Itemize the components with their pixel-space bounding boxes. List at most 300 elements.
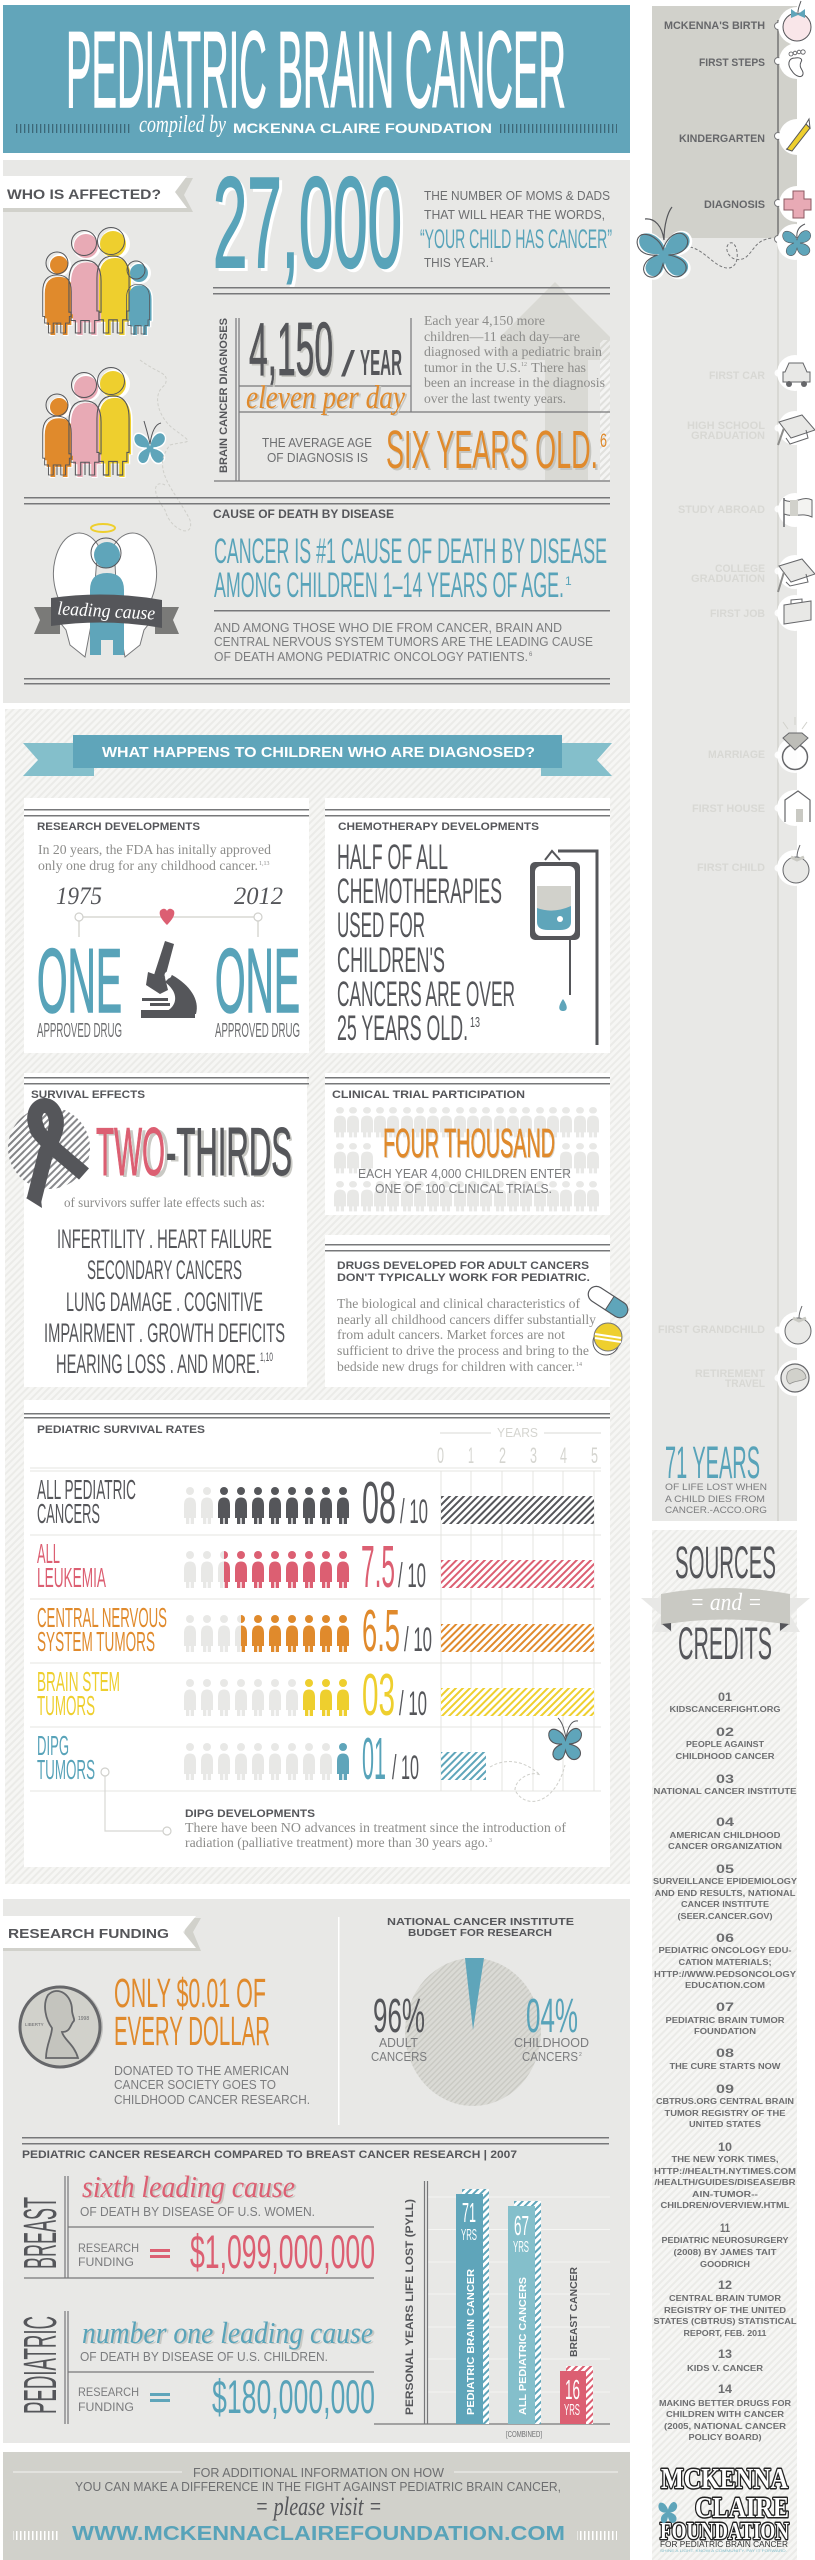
comparison: breast cancer: BREAST (14, 2197, 66, 2269)
logo: mckenna claire foundation: CLAIRE (695, 2492, 789, 2524)
list: sources: GOODRICH (700, 2260, 750, 2269)
icon: capsule (585, 1283, 631, 1321)
timeline labels lost: COLLEGE (715, 563, 765, 575)
list: sources: 02 (716, 1725, 734, 1739)
row: brain stem tumors: / 10 (399, 1685, 427, 1723)
pie chart: nci budget: BUDGET FOR RESEARCH (408, 1927, 552, 1939)
list: sources: 13 (718, 2347, 732, 2361)
panel: who is affected (3, 151, 630, 703)
bar chart: personal years of life lost: PERSONAL YEARS LIFE LOST (PYLL) (404, 2199, 416, 2415)
list: sources: KIDS V. CANCER (687, 2364, 763, 2373)
timeline labels lost: FIRST HOUSE (692, 803, 765, 815)
row: central nervous system tumors: 6.5 (362, 1598, 400, 1664)
row: all leukemia: LEUKEMIA (37, 1562, 106, 1593)
list: sources: CATION MATERIALS; (678, 1958, 772, 1967)
card: survival effects (8, 1073, 309, 1387)
statistic: one cent of every dollar: EVERY DOLLAR (114, 2008, 270, 2054)
list: sources: PEDIATRIC ONCOLOGY EDU- (658, 1946, 792, 1955)
icon: flag (778, 493, 812, 527)
icon: penny: LIBERTY (25, 2022, 44, 2027)
icon: angel with leading cause banner (34, 524, 179, 657)
list: sources: 03 (716, 1772, 734, 1786)
people grid (334, 1107, 599, 1211)
list: sources: FOUNDATION (694, 2027, 756, 2036)
text: parents hearing the words: THAT WILL HEAR THE WORDS, (424, 207, 605, 222)
timeline labels lost: RETIREMENT (695, 1368, 765, 1380)
panel: what happens to children: TWO-THIRDS (98, 1116, 294, 1192)
list: sources: PEDIATRIC NEUROSURGERY (662, 2236, 789, 2245)
card: survival effects: -THIRDS (166, 1114, 292, 1190)
text: brain cancer diagnoses: 4,150 (249, 307, 333, 391)
card: research developments: APPROVED DRUG (37, 1020, 122, 1042)
list: sources: CHILDREN WITH CANCER (666, 2410, 784, 2419)
footer: call to action (3, 2452, 630, 2560)
statistic: one cent of every dollar: DONATED TO THE AMERICAN (114, 2064, 289, 2078)
timeline labels lost: GRADUATION (691, 573, 765, 585)
timeline labels lost: FIRST CAR (709, 370, 765, 382)
text: half of all chemotherapies: HALF OF ALL (337, 838, 448, 877)
row: all pediatric cancers: ALL PEDIATRIC (37, 1474, 136, 1505)
text: brain cancer diagnoses: OF DIAGNOSIS IS (267, 450, 368, 465)
row: brain stem tumors: BRAIN STEM (37, 1666, 120, 1697)
list: sources: 06 (716, 1931, 734, 1945)
ribbon heading (23, 735, 612, 776)
timeline labels lived: FIRST STEPS (699, 57, 765, 69)
text: brain cancer diagnoses: over the last twenty years. (424, 392, 566, 407)
row: all pediatric cancers: 08 (362, 1470, 396, 1536)
card: drugs developed for adults: from adult cancers. Market forces are not (337, 1328, 565, 1343)
card: drugs developed for adults: DON'T TYPICALLY WORK FOR PEDIATRIC. (337, 1272, 590, 1284)
text: brain cancer diagnoses: been an increase in the diagnosis (424, 376, 605, 391)
text: half of all chemotherapies: 13 (470, 1014, 480, 1031)
logo: mckenna claire foundation (658, 2463, 790, 2553)
list: sources: 05 (716, 1862, 734, 1876)
list: sources: (2008) BY JAMES TAIT (674, 2248, 777, 2257)
timeline nodes (774, 22, 782, 1382)
list: sources: (SEER.CANCER.GOV) (678, 1912, 773, 1921)
statistic: four thousand: FOUR THOUSAND (383, 1120, 555, 1166)
card: pediatric survival rates (24, 1400, 610, 1867)
list: sources: UNITED STATES (689, 2120, 762, 2129)
list: sources: NATIONAL CANCER INSTITUTE (654, 1787, 797, 1796)
list: sources: THE NEW YORK TIMES, (672, 2155, 778, 2164)
timeline labels lived (664, 20, 765, 211)
pie chart: nci budget: 2 (579, 2052, 582, 2058)
card: chemotherapy developments (325, 798, 610, 1053)
list: sources: STATES (CBTRUS) STATISTICAL (654, 2317, 797, 2326)
years axis: 4 (560, 1443, 567, 1468)
list: sources: 01 (718, 1690, 732, 1704)
statistic: four thousand: FOUR THOUSAND (384, 1121, 556, 1167)
footer: call to action: FOR ADDITIONAL INFORMATION ON HOW (193, 2465, 445, 2480)
comparison: breast cancer: RESEARCH (78, 2241, 139, 2255)
list: sources: POLICY BOARD) (688, 2433, 762, 2442)
text: brain cancer diagnoses: 6 (600, 431, 607, 452)
text: cause of death by disease: 6 (529, 652, 533, 658)
list: sources (653, 1690, 798, 2442)
statistic: one approved drug 1975 (37, 931, 122, 1042)
pie chart: nci budget: 96% (373, 1990, 425, 2043)
panel: what happens to children (5, 709, 631, 1884)
list: sources: /HEALTH/GUIDES/DISEASE/BR (654, 2178, 796, 2187)
card: drugs developed for adults: DRUGS DEVELOPED FOR ADULT CANCERS (337, 1260, 589, 1272)
list: sources: REGISTRY OF THE UNITED (664, 2306, 786, 2315)
statistic: four thousand: EACH YEAR 4,000 CHILDREN ENTER (358, 1166, 571, 1181)
text: half of all chemotherapies (337, 838, 515, 1048)
card: chemotherapy developments: CANCERS ARE OVER (337, 975, 515, 1014)
row: central nervous system tumors: CENTRAL NERVOUS (37, 1602, 167, 1633)
row: dipg tumors: / 10 (392, 1749, 419, 1787)
icon: yellow pill (593, 1323, 622, 1355)
icon: first child (777, 845, 813, 886)
icon: small butterfly (777, 224, 813, 260)
icon: microscope (141, 941, 197, 1018)
row: brain stem tumors: 03 (362, 1662, 395, 1728)
text: brain cancer diagnoses: THE AVERAGE AGE (262, 435, 372, 450)
statistic: four thousand: ONE OF 100 CLINICAL TRIALS. (375, 1181, 552, 1196)
list: sources: (2005, NATIONAL CANCER (664, 2422, 786, 2431)
footer: call to action: = please visit = (255, 2492, 382, 2521)
card: drugs developed for adults: sufficient to drive the process and bring to the (337, 1344, 589, 1359)
list: late effects: LUNG DAMAGE . COGNITIVE (66, 1287, 263, 1317)
card: drugs developed for adults: The biological and clinical characteristics of (337, 1297, 580, 1312)
statistic: one cent of every dollar: CHILDHOOD CANCER RESEARCH. (114, 2093, 310, 2107)
list: sources: AIN-TUMOR-- (692, 2190, 758, 2199)
row: central nervous system tumors: / 10 (404, 1621, 432, 1659)
text: brain cancer diagnoses: BRAIN CANCER DIAGNOSES (218, 318, 230, 473)
text: cause of death by disease: 1 (565, 574, 572, 588)
row: dipg tumors: TUMORS (37, 1754, 95, 1785)
list: sources: CANCER INSTITUTE (681, 1900, 770, 1909)
timeline labels lost: TRAVEL (725, 1378, 765, 1390)
section banner: research funding: RESEARCH FUNDING (8, 1926, 169, 1941)
text: brain cancer diagnoses: 12 (521, 362, 527, 368)
heading: sources and credits (641, 1537, 810, 1669)
icon: baby with bow (778, 1, 815, 45)
text: cause of death by disease: CENTRAL NERVOUS SYSTEM TUMORS ARE THE LEADING CAUSE (214, 634, 593, 649)
panel: research funding: PEDIATRIC CANCER RESEARCH COMPARED TO BREAST CANCER RESEARCH | 2007 (22, 2149, 517, 2161)
statistic: four thousand (358, 1120, 571, 1196)
statistic: 71 years of life lost: OF LIFE LOST WHEN (665, 1482, 767, 1493)
subtitle: MCKENNA CLAIRE FOUNDATION (233, 120, 492, 136)
text: brain cancer diagnoses: Each year 4,150 more (424, 314, 545, 329)
icon: college cap (778, 555, 815, 592)
callout: dipg developments (101, 1768, 566, 1851)
card: research developments: APPROVED DRUG (215, 1020, 300, 1042)
list: sources: CENTRAL BRAIN TUMOR (669, 2294, 781, 2303)
text: cause of death by disease (213, 507, 610, 664)
callout: dipg developments: DIPG DEVELOPMENTS (185, 1808, 315, 1820)
text: brain cancer diagnoses: SIX YEARS OLD. (386, 420, 598, 480)
icon: family with butterfly (43, 360, 191, 531)
panel: research funding: PEDIATRIC (14, 2316, 66, 2414)
callout: dipg developments: There have been NO advances in treatment since the introduction of (185, 1821, 566, 1836)
text: parents hearing the words: THE NUMBER OF MOMS & DADS (424, 188, 610, 203)
row: all pediatric cancers: CANCERS (37, 1498, 100, 1529)
callout: dipg developments: 3 (489, 1838, 492, 1844)
bar chart: personal years of life lost: YRS (513, 2239, 529, 2256)
icon: grandchild (779, 1306, 815, 1348)
text: brain cancer diagnoses: eleven per day (248, 381, 407, 417)
list: sources: PEOPLE AGAINST (686, 1740, 764, 1749)
logo: mckenna claire foundation: SHINE A LIGHT. KNOW A COMMUNITY. PAY IT FORWARD. (660, 2548, 787, 2553)
text: brain cancer diagnoses: / (341, 343, 355, 384)
timeline labels lost: FIRST CHILD (697, 862, 765, 874)
list: sources: SURVEILLANCE EPIDEMIOLOGY (653, 1877, 798, 1886)
pie chart: nci budget (371, 1916, 589, 2106)
icon: penny: 1998 (78, 2016, 89, 2022)
bar chart: personal years of life lost: YRS (461, 2227, 477, 2244)
list: sources: REPORT, FEB. 2011 (684, 2329, 767, 2338)
list: late effects: HEARING LOSS . AND MORE. (56, 1349, 260, 1379)
list: late effects: INFERTILITY . HEART FAILURE (57, 1224, 272, 1254)
list: sources: 04 (716, 1815, 734, 1829)
row: all pediatric cancers: / 10 (400, 1493, 428, 1531)
timeline labels lost: FIRST GRANDCHILD (658, 1324, 765, 1336)
text: parents hearing the words (420, 188, 612, 270)
icon: penny (20, 1986, 103, 2068)
text: half of all chemotherapies: CHEMOTHERAPIES (337, 872, 502, 911)
icon: family of four (43, 228, 153, 336)
statistic: 71 years of life lost: CANCER.-ACCO.ORG (665, 1505, 767, 1516)
section banner: who is affected (3, 176, 187, 208)
list: sources: TUMOR REGISTRY OF THE (664, 2109, 786, 2118)
statistic: 27,000 (213, 151, 405, 298)
logo: mckenna claire foundation: MCKENNA (661, 2463, 788, 2495)
icon: car (777, 355, 813, 391)
row: central nervous system tumors (38, 1608, 594, 1652)
logo: mckenna claire foundation: FOR PEDIATRIC BRAIN CANCER (660, 2540, 788, 2549)
list: sources: PEDIATRIC BRAIN TUMOR (666, 2016, 785, 2025)
text: brain cancer diagnoses: 4,150 (251, 309, 335, 393)
panel: research funding (3, 1899, 630, 2443)
icon: large butterfly with flight path (637, 207, 772, 278)
bar chart: personal years of life lost: YRS (564, 2402, 580, 2419)
list: sources: HTTP://WWW.PEDSONCOLOGY (654, 1970, 797, 1979)
statistic: one cent of every dollar (114, 1970, 310, 2107)
list: sources: CHILDREN/OVERVIEW.HTML (660, 2201, 790, 2210)
comparison: breast cancer: FUNDING (78, 2255, 134, 2269)
comparison: pediatric cancer (14, 2311, 375, 2424)
panel: who is affected: 27,000 (213, 151, 402, 295)
panel: what happens to children: ONE (215, 931, 300, 1032)
years axis: 1 (468, 1443, 474, 1468)
icon: footprint (779, 43, 815, 79)
comparison: pediatric cancer: number one leading cause (84, 2316, 375, 2351)
bar chart: personal years of life lost: [COMBINED] (506, 2430, 542, 2439)
timeline labels lost (658, 370, 765, 1390)
icon: awareness ribbon (8, 1105, 90, 1208)
subtitle: compiled by (139, 112, 226, 138)
footer: call to action: WWW.MCKENNACLAIREFOUNDATION.COM (72, 2523, 565, 2545)
text: brain cancer diagnoses: diagnosed with a pediatric brain (424, 345, 602, 360)
text: brain cancer diagnoses: SIX YEARS OLD. (388, 422, 600, 482)
list: sources: 12 (718, 2278, 732, 2292)
pie chart: nci budget: CANCERS (522, 2050, 578, 2064)
ribbon heading: WHAT HAPPENS TO CHILDREN WHO ARE DIAGNOSED? (102, 744, 535, 761)
icon: iv bag and drip (530, 851, 597, 1045)
text: parents hearing the words: THIS YEAR. (424, 255, 489, 270)
panel: who is affected: 27,000 (216, 154, 405, 298)
card: research developments: 1,13 (259, 861, 270, 867)
list: sources: KIDSCANCERFIGHT.ORG (670, 1705, 780, 1714)
years axis: YEARS (497, 1425, 538, 1440)
card: drugs developed for adults: bedside new drugs for children with cancer. (337, 1360, 575, 1375)
card: pediatric survival rates: PEDIATRIC SURVIVAL RATES (37, 1424, 205, 1436)
list: sources: MAKING BETTER DRUGS FOR (659, 2399, 791, 2408)
text: brain cancer diagnoses (214, 307, 610, 482)
text: brain cancer diagnoses: children—11 each day—are (424, 330, 580, 345)
bar chart: personal years of life lost: PEDIATRIC BRAIN CANCER (466, 2268, 477, 2415)
bar chart: personal years of life lost: 16 (565, 2374, 580, 2405)
section banner: research funding (3, 1916, 201, 1951)
list: late effects (44, 1224, 285, 1379)
bar chart: personal years of life lost (374, 2181, 610, 2439)
statistic: one cent of every dollar: ONLY $0.01 OF (114, 1970, 266, 2016)
list: sources: AND END RESULTS, NATIONAL (654, 1889, 796, 1898)
timeline labels lost: HIGH SCHOOL (687, 420, 765, 432)
section banner: who is affected: WHO IS AFFECTED? (7, 186, 161, 202)
row: dipg tumors (37, 1726, 486, 1792)
card: research developments (24, 798, 309, 1053)
list: sources: AMERICAN CHILDHOOD (670, 1831, 781, 1840)
card: research developments: ONE (37, 931, 122, 1032)
timeline labels lived: DIAGNOSIS (704, 199, 765, 211)
pie chart: nci budget: NATIONAL CANCER INSTITUTE (387, 1916, 574, 1928)
statistic: 71 years of life lost: A CHILD DIES FROM (665, 1494, 765, 1505)
callout: dipg developments: radiation (palliative treatment) more than 30 years ago. (185, 1836, 488, 1851)
years axis: 2 (499, 1443, 506, 1468)
icon: globe (777, 1360, 813, 1396)
timeline labels lived: MCKENNA'S BIRTH (664, 20, 765, 32)
comparison: pediatric cancer: FUNDING (78, 2400, 134, 2414)
row: brain stem tumors: TUMORS (37, 1690, 95, 1721)
pie chart: nci budget: CHILDHOOD (514, 2036, 589, 2050)
timeline labels lost: STUDY ABROAD (678, 504, 765, 516)
subtitle (139, 112, 492, 138)
bar chart: personal years of life lost: 71 (462, 2197, 476, 2228)
text: parents hearing the words: “YOUR CHILD HAS CANCER” (420, 224, 612, 254)
card: research developments: only one drug for any childhood cancer. (38, 859, 258, 874)
text: half of all chemotherapies: 25 YEARS OLD. (337, 1009, 468, 1048)
timeline labels lost: MARRIAGE (708, 749, 765, 761)
list: sources: 11 (720, 2221, 730, 2235)
text: brain cancer diagnoses: YEAR (360, 342, 402, 383)
card: clinical trial participation: CLINICAL TRIAL PARTICIPATION (332, 1089, 525, 1101)
text: half of all chemotherapies: CHILDREN'S (337, 941, 445, 980)
list: late effects: IMPAIRMENT . GROWTH DEFICITS (44, 1318, 285, 1348)
row: brain stem tumors (37, 1662, 594, 1728)
statistic: one cent of every dollar: CANCER SOCIETY GOES TO (114, 2078, 276, 2092)
comparison: pediatric cancer: $180,000,000 (212, 2370, 375, 2423)
row: all leukemia: / 10 (398, 1557, 426, 1595)
icon: butterfly over survival chart (490, 1718, 581, 1801)
row: dipg tumors: DIPG (37, 1730, 69, 1761)
list: late effects: 1,10 (260, 1350, 273, 1364)
comparison: breast cancer (14, 2169, 375, 2278)
list: sources: CANCER ORGANIZATION (668, 1842, 782, 1851)
list: sources: THE CURE STARTS NOW (670, 2062, 781, 2071)
text: parents hearing the words: 1 (490, 258, 494, 264)
list: sources: HTTP://HEALTH.NYTIMES.COM (654, 2167, 796, 2176)
footer: call to action: YOU CAN MAKE A DIFFERENCE IN THE FIGHT AGAINST PEDIATRIC BRAIN CANCER, (75, 2479, 561, 2494)
list: sources: 14 (718, 2382, 732, 2396)
statistic: 71 years of life lost (665, 1437, 767, 1516)
icon: briefcase (777, 595, 813, 631)
bar chart: personal years of life lost: ALL PEDIATRIC CANCERS (518, 2277, 529, 2415)
card: drugs developed for adults: nearly all childhood cancers differ substantially (337, 1313, 596, 1328)
years axis: 5 (591, 1443, 598, 1468)
text: half of all chemotherapies: USED FOR (337, 906, 425, 945)
list: sources: CHILDHOOD CANCER (676, 1752, 775, 1761)
text: cause of death by disease: AND AMONG THOSE WHO DIE FROM CANCER, BRAIN AND (214, 620, 562, 635)
row: all pediatric cancers (37, 1470, 594, 1536)
timeline labels lost: GRADUATION (691, 430, 765, 442)
list: sources: CBTRUS.ORG CENTRAL BRAIN (656, 2097, 794, 2106)
list: sources: EDUCATION.COM (685, 1981, 765, 1990)
list: sources: 07 (716, 2000, 734, 2014)
icon: house (777, 790, 813, 826)
years axis: 0 (437, 1443, 444, 1468)
years axis: 3 (530, 1443, 537, 1468)
card: chemotherapy developments: CHEMOTHERAPY DEVELOPMENTS (338, 821, 539, 833)
icon: graduation cap (778, 411, 815, 445)
list: sources: 08 (716, 2046, 734, 2060)
comparison: breast cancer: sixth leading cause (82, 2169, 295, 2204)
timeline labels lost: FIRST JOB (710, 608, 765, 620)
comparison: breast cancer: $1,099,000,000 (190, 2225, 375, 2278)
list: sources: 09 (716, 2082, 734, 2096)
text: brain cancer diagnoses: eleven per day (246, 380, 405, 416)
text: cause of death by disease: OF DEATH AMONG PEDIATRIC ONCOLOGY PATIENTS. (214, 649, 528, 664)
statistic: two-thirds: TWO (96, 1114, 165, 1190)
list: sources: 10 (718, 2140, 732, 2154)
comparison: breast cancer: sixth leading cause (84, 2170, 297, 2205)
card: research developments: In 20 years, the FDA has initally approved (38, 843, 271, 858)
card: drugs developed for adults (325, 1235, 631, 1387)
row: all leukemia: ALL (37, 1538, 60, 1569)
row: all leukemia (37, 1544, 594, 1588)
bar chart: personal years of life lost: 67 (514, 2210, 529, 2241)
timeline 1975 to 2012: 1975 (56, 883, 102, 910)
comparison: pediatric cancer: RESEARCH (78, 2385, 139, 2399)
panel: sources and credits (641, 1530, 810, 2560)
card: clinical trial participation (325, 1073, 610, 1215)
icon: angel with leading cause banner: leading cause (57, 598, 156, 625)
list: late effects: SECONDARY CANCERS (87, 1255, 242, 1285)
card: research developments: RESEARCH DEVELOPMENTS (37, 821, 200, 833)
timeline 1975 to 2012 (56, 883, 283, 937)
bar chart: personal years of life lost: BREAST CANCER (569, 2266, 580, 2357)
card: survival effects: SURVIVAL EFFECTS (31, 1089, 145, 1101)
row: all leukemia: 7.5 (361, 1534, 395, 1600)
timeline 1975 to 2012: 2012 (234, 883, 283, 910)
text: cause of death by disease: CAUSE OF DEATH BY DISEASE (213, 507, 394, 521)
card: drugs developed for adults: 14 (576, 1362, 582, 1368)
comparison: pediatric cancer: number one leading cause (82, 2315, 373, 2350)
icon: diamond ring (777, 717, 813, 773)
text: brain cancer diagnoses: tumor in the U.S. There has (424, 361, 586, 376)
pie chart: nci budget: 04% (526, 1990, 578, 2043)
timeline labels lived: KINDERGARTEN (679, 133, 765, 145)
pie chart: nci budget: ADULT (379, 2036, 418, 2050)
years axis (30, 1425, 601, 1791)
icon: medical cross (779, 186, 815, 222)
heading: sources and credits: = and = (690, 1590, 762, 1616)
row: central nervous system tumors: SYSTEM TUMORS (37, 1626, 155, 1657)
card: survival effects: of survivors suffer late effects such as: (64, 1196, 265, 1211)
header banner (3, 5, 630, 153)
